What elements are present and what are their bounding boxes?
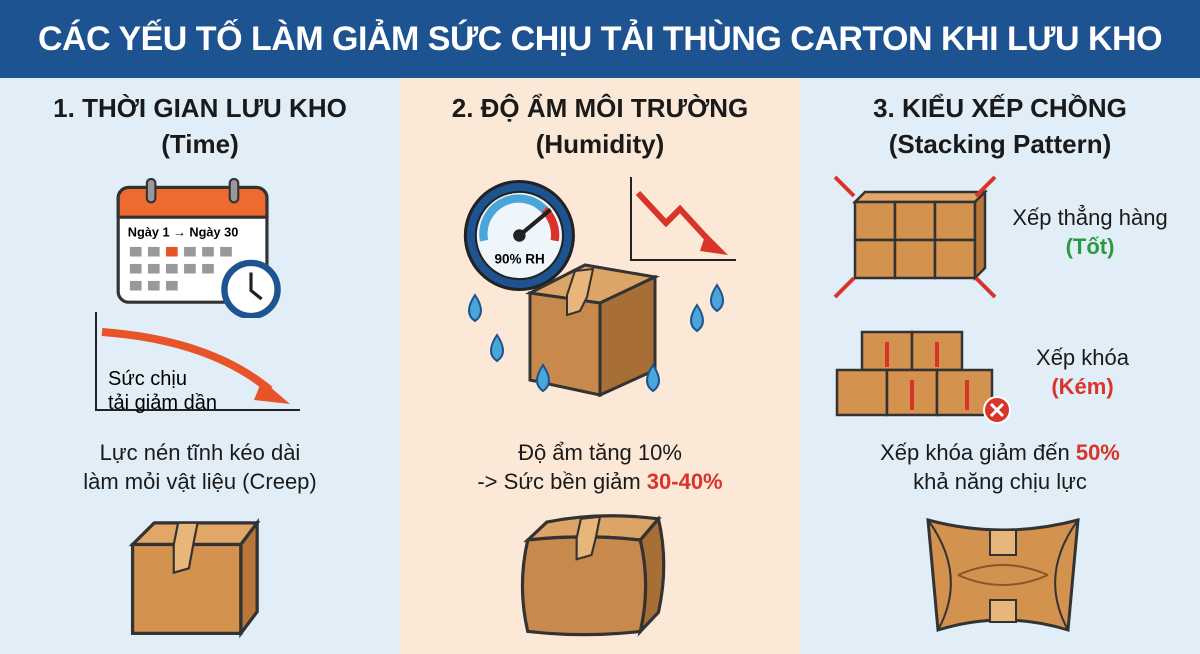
- heading 3: 3. KIỂU XẾP CHỒNG: [873, 93, 1127, 123]
- icon: hygrometer: 90% RH: [494, 252, 545, 267]
- chart: declining strength: tải giảm dần: [108, 392, 217, 414]
- icon: box 1: [128, 518, 260, 638]
- text: stacking effect: [880, 440, 1120, 494]
- heading 2: (Humidity): [536, 129, 664, 159]
- chart: downward arrow: [630, 177, 736, 261]
- heading 3: (Stacking Pattern): [889, 129, 1111, 159]
- text: humidity effect: -> Sức bền giảm 30-40%: [477, 469, 723, 494]
- panel: stacking: [800, 78, 1200, 654]
- icon: aligned stacking: [834, 176, 996, 298]
- text: humidity effect: Độ ẩm tăng 10%: [518, 440, 682, 465]
- icon: calendar: Ngày 1 → Ngày 30: [128, 224, 238, 239]
- label: interlocked bad: Xếp khóa: [1036, 345, 1129, 370]
- heading 1: [53, 93, 347, 159]
- title: CÁC YẾU TỐ LÀM GIẢM SỨC CHỊU TẢI THÙNG CARTON KHI LƯU KHO: [38, 20, 1162, 58]
- label: interlocked bad: (Kém): [1051, 374, 1114, 399]
- label: interlocked bad: [1036, 345, 1129, 399]
- text: creep: Lực nén tĩnh kéo dài: [100, 440, 300, 465]
- text: creep: [83, 440, 317, 494]
- heading 2: 2. ĐỘ ẨM MÔI TRƯỜNG: [452, 93, 748, 123]
- label: aligned good: (Tốt): [1066, 234, 1114, 259]
- text: creep: làm mỏi vật liệu (Creep): [83, 469, 317, 494]
- label: aligned good: [1012, 204, 1168, 259]
- chart: declining strength: [95, 312, 300, 414]
- title: [0, 0, 1200, 78]
- icon: bulging box: [520, 514, 666, 637]
- icon: wet box with drops: [468, 263, 724, 398]
- text: stacking effect: Xếp khóa giảm đến 50%: [880, 440, 1120, 465]
- text: stacking effect: khả năng chịu lực: [913, 469, 1087, 494]
- panel: time: [0, 78, 400, 654]
- icon: crushed box: [926, 518, 1080, 632]
- icon: interlocked stacking: [836, 330, 1011, 424]
- panel: humidity: [400, 78, 800, 654]
- text: humidity effect: [477, 440, 723, 494]
- icon: hygrometer: [464, 180, 575, 291]
- chart: declining strength: Sức chịu: [108, 368, 187, 390]
- heading 2: [452, 93, 748, 159]
- icon: calendar: [116, 178, 281, 318]
- heading 1: (Time): [161, 129, 239, 159]
- heading 1: 1. THỜI GIAN LƯU KHO: [53, 93, 347, 123]
- heading 3: [873, 93, 1127, 159]
- label: aligned good: Xếp thẳng hàng: [1012, 205, 1168, 230]
